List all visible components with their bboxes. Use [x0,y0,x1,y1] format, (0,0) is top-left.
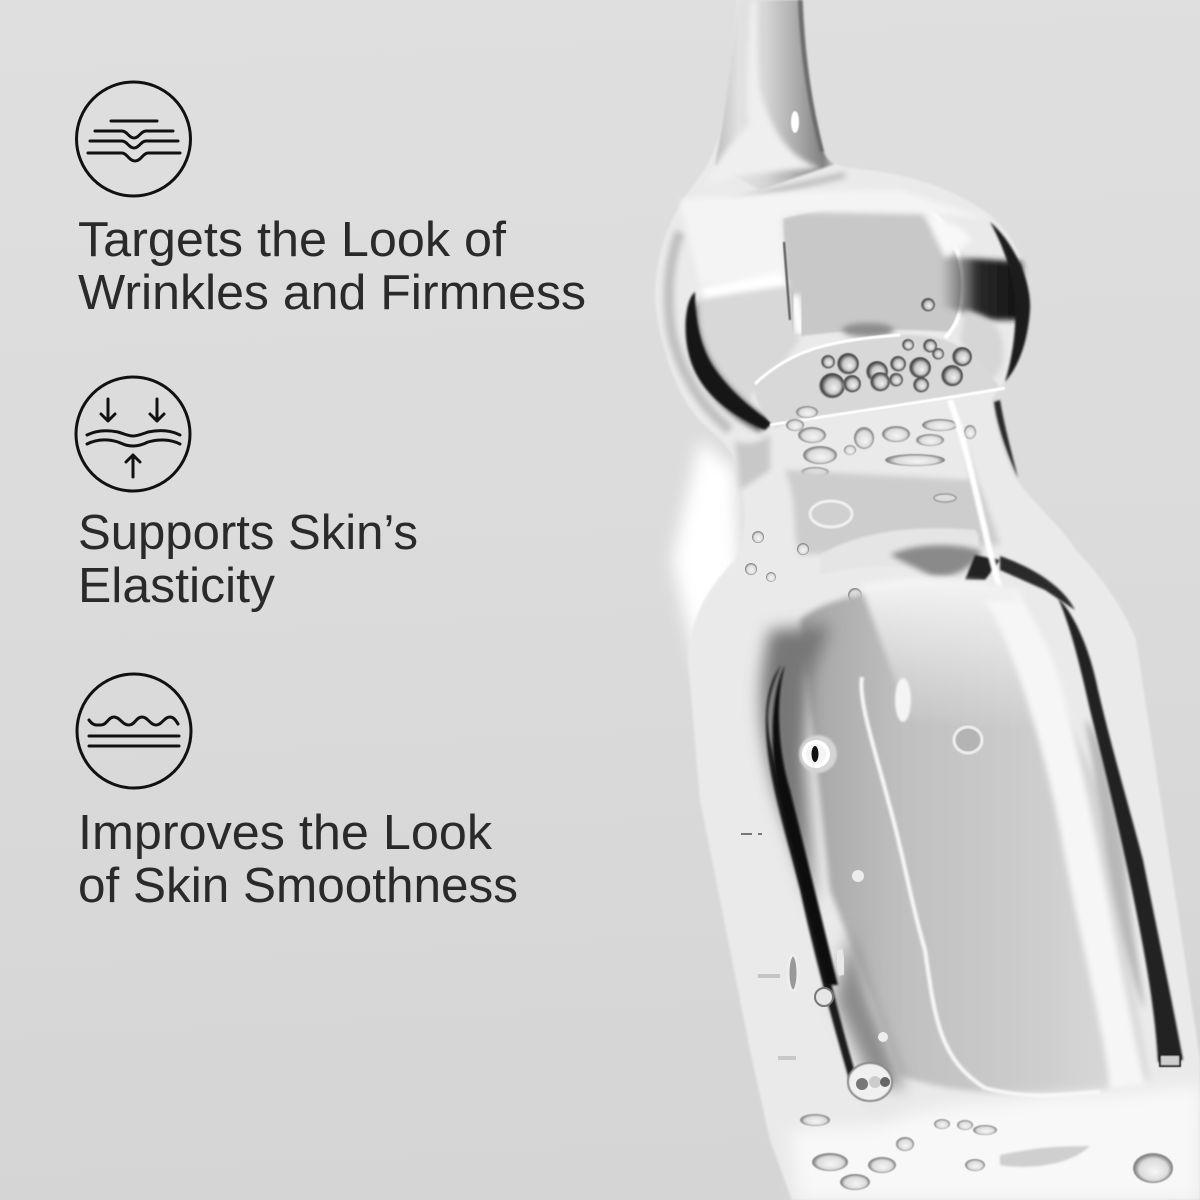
neck highlights [692,0,845,215]
heading: targets wrinkles: Targets the Look of [78,213,506,267]
bottom white base [790,1085,1200,1200]
heading: improves smoothness: of Skin Smoothness [78,859,518,913]
right stroke end cap [1160,1055,1180,1066]
icon: skin layers dipping [76,82,190,196]
darker corner bottom right [1160,1110,1200,1200]
left dark wall stroke [766,665,859,1090]
feature 3: smoothness [77,674,518,913]
bubble row lower [786,406,976,477]
left dark wall thick segment [773,665,838,985]
panel top light fade [860,578,1060,730]
bottom bubbles [800,1114,1173,1190]
feature 1: wrinkles and firmness [76,82,586,320]
soft dark halo left wall [761,625,830,910]
waist [785,400,1075,610]
neck spout [715,0,835,190]
heading: supports elasticity: Supports Skin’s [78,506,418,560]
bubble cluster bottom left [848,1063,905,1130]
heading: targets wrinkles: Wrinkles and Firmness [78,266,586,320]
upper bulb interior [680,190,990,430]
bottom streak [1000,1146,1090,1167]
faint marks right band [1085,720,1145,1010]
white glow left of ampoule [672,440,740,680]
white right band [985,600,1145,1090]
marks and small bubbles [741,678,911,1058]
white line inside body [861,677,1100,1096]
bulb right dark patch [922,210,1030,382]
halo near bottom of left stroke [835,930,905,1090]
bubble row upper [819,298,972,399]
right dark wall stroke [1058,598,1183,1062]
bubble large left [799,735,837,773]
photo: glass ampoule [655,0,1200,1200]
shoulder collar [735,335,1018,490]
left bulb wall shading [669,232,730,430]
icon: skin with compression arrows [76,377,190,491]
small bubbles outer left [745,531,862,602]
heading: supports elasticity: Elasticity [78,559,276,613]
icon: smooth wave layers [77,674,191,788]
feature 2: elasticity [76,377,418,613]
lower body glass gray panel [800,584,1150,1094]
heading: improves smoothness: Improves the Look [78,806,493,860]
ampoule silhouette [655,0,1200,1200]
bubble centre [954,727,982,753]
bulb left dark patch [686,292,772,432]
